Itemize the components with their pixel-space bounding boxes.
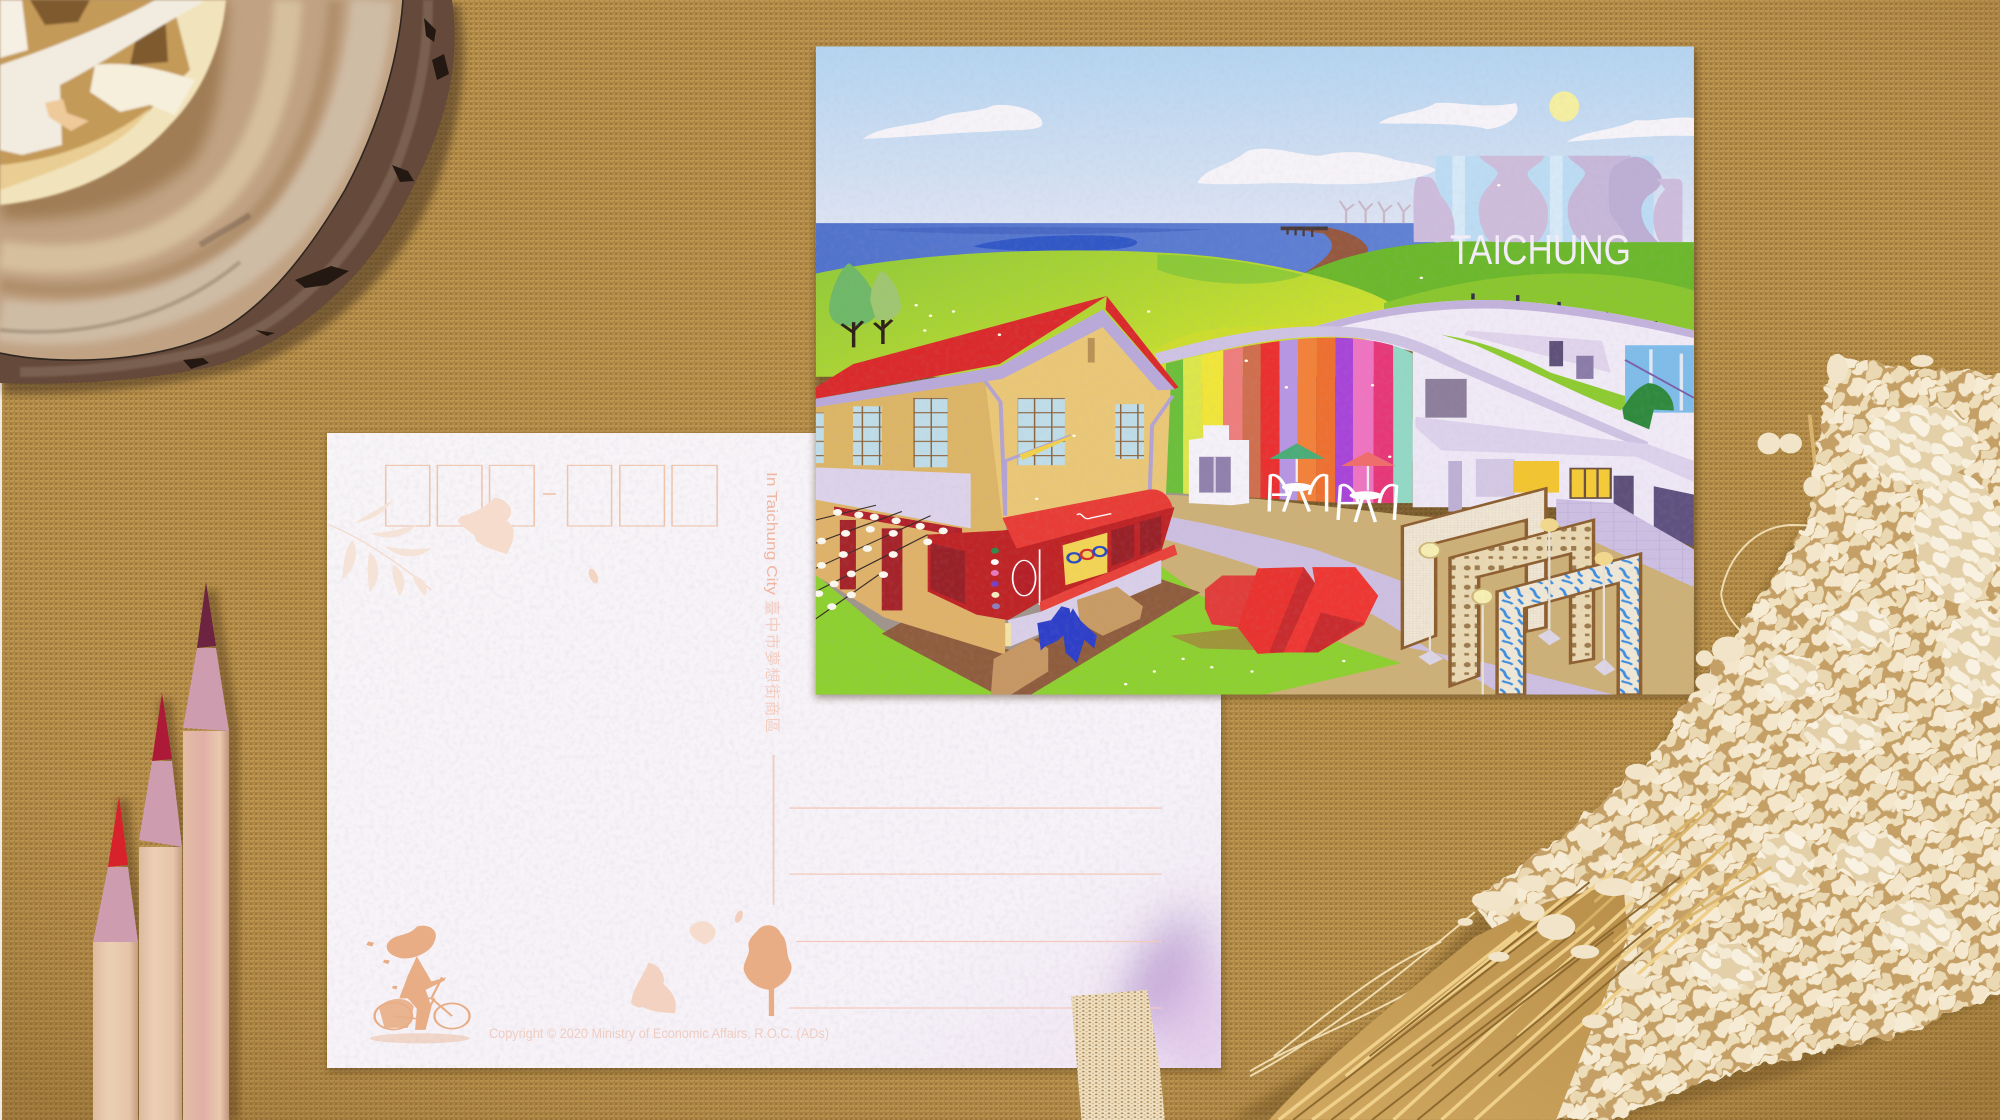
faded monstera leaf: [458, 497, 514, 554]
lower-left petal clusters: [1458, 764, 1650, 1028]
lawns: [816, 566, 1401, 695]
thin loose fibres: [1250, 525, 1872, 1076]
sky: [816, 46, 1694, 248]
bark knots: [183, 18, 449, 369]
brown platform: [882, 579, 1200, 695]
string lights: [814, 505, 948, 619]
bouquet shadow: [1231, 390, 2000, 1120]
purple fold shadow: [1102, 896, 1221, 1068]
postal code boxes: [386, 465, 717, 526]
wood bark rim: [0, 0, 455, 384]
faded palm leaf: [329, 499, 431, 596]
stem bundle: [1269, 842, 1728, 1120]
drainpipes and street lamp: [985, 381, 1173, 516]
blue chairs: [1037, 606, 1097, 663]
vertical caption: 臺中市夢想街商區: [763, 600, 781, 733]
pencil 2 crimson: [139, 693, 182, 1120]
flower mass: [1470, 357, 2000, 1120]
pencil shadows: [122, 590, 232, 1120]
patio: white portal: [1189, 425, 1249, 505]
bowl: [0, 0, 226, 205]
flower highlights: [1695, 405, 2000, 992]
trees: [829, 263, 901, 347]
shop front: [928, 507, 1174, 620]
wood slice coaster with dried flower bowl: [0, 0, 464, 394]
three coloured pencils: [93, 582, 232, 1120]
gate: blue calligraphy panel: [1497, 554, 1641, 695]
pencil 3 plum: [183, 582, 229, 1120]
recipient lines: [774, 755, 1162, 1008]
pier: [1282, 227, 1368, 274]
wind turbines: [1340, 201, 1410, 223]
museum building with green roof: [1154, 300, 1694, 461]
base storey: [1008, 560, 1161, 646]
small maple leaf: [690, 921, 716, 944]
red sculpture: [1170, 567, 1378, 654]
house gable wall: [985, 320, 1170, 520]
pencil 1 red: [93, 796, 138, 1120]
opera house towers: [1414, 156, 1682, 244]
vertical caption: [763, 472, 781, 733]
lavender walkway: [1163, 516, 1614, 695]
snow-like speckles: [914, 184, 1501, 685]
faded fallen leaf: [631, 963, 676, 1013]
balcony wall: [816, 467, 971, 528]
copyright line: Copyright © 2020 Ministry of Economic Affairs, R.O.C. (ADs): [489, 1025, 829, 1041]
postcard back: [327, 433, 1245, 1120]
rooftop rails: [1471, 293, 1658, 322]
boxes: [991, 586, 1143, 695]
small falling leaf: [587, 568, 600, 584]
clouds: [863, 103, 1694, 184]
awning: [1002, 489, 1173, 549]
sea: [816, 223, 1436, 278]
patio: umbrellas and tables: [1269, 443, 1397, 522]
house left wall: [816, 377, 1008, 541]
green hills: [816, 241, 1694, 377]
wood cut face: [0, 0, 410, 370]
house: [816, 296, 1179, 655]
card printed artwork: [329, 465, 1165, 1120]
ground floor wall: [816, 503, 1005, 655]
rainbow wall: [1166, 335, 1413, 503]
gate: woven panel: [1402, 488, 1546, 648]
lower building wing: [1413, 417, 1694, 596]
coloured dots: [991, 548, 1000, 609]
cyclist silhouette: [366, 926, 470, 1043]
gate: perforated panel: [1450, 520, 1594, 686]
stems showing through the blossoms: [1575, 788, 1771, 952]
sun: [1549, 91, 1579, 122]
poster with three figures: [1063, 533, 1107, 585]
postcard front: Taichung illustration: [814, 46, 1697, 698]
red ledge: [1040, 544, 1177, 612]
shop round logo: [1013, 560, 1036, 596]
ribbon scrap: [1071, 990, 1165, 1120]
roof: [816, 296, 1107, 399]
TAICHUNG wordmark: TAICHUNG: [1450, 226, 1631, 273]
dried flower bouquet: [1231, 354, 2000, 1120]
vertical caption: In Taichung City: [763, 472, 780, 596]
plaza ground: [1161, 494, 1694, 694]
stray flower clusters: [1695, 354, 1933, 691]
plaza lamps: [1418, 518, 1615, 695]
windows: [853, 406, 882, 465]
tree silhouette: [744, 925, 792, 1016]
